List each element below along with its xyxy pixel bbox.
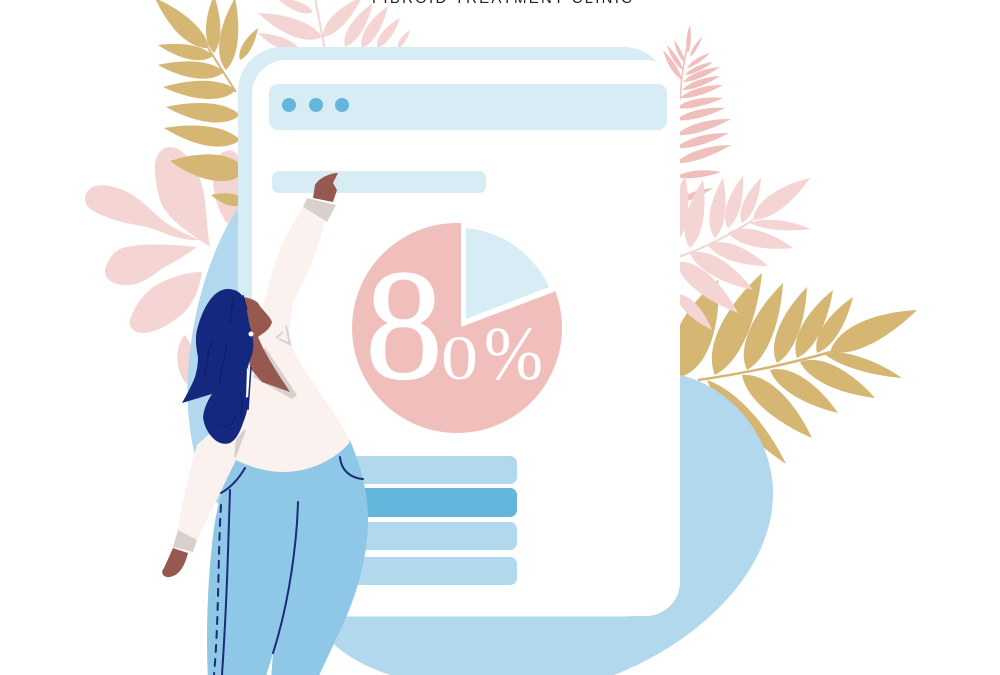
window dots [282, 98, 349, 112]
collar shadow [253, 347, 297, 399]
window frame [238, 47, 668, 617]
heading bar [272, 171, 486, 193]
address bar [269, 84, 667, 130]
hair [182, 289, 253, 444]
jeans [207, 440, 368, 675]
cuffs [173, 198, 336, 552]
percent sign: % [484, 312, 543, 396]
pie chart value: 8 [365, 238, 443, 413]
browser window card [238, 47, 680, 617]
sweater body and arms [178, 207, 350, 540]
percent suffix zero: 0 [441, 325, 478, 393]
earring [248, 332, 254, 336]
hair highlight [246, 367, 249, 398]
woman figure [162, 173, 368, 675]
hands, face and neck [162, 173, 338, 577]
leaf: pink frond top [255, 0, 412, 56]
background blue blob [188, 205, 773, 675]
jeans seams and pocket lines [214, 457, 363, 675]
armpit creases [276, 326, 290, 344]
loose hair strand [248, 367, 251, 410]
leaf: gold frond right [662, 266, 922, 469]
leaf: gold frond top left [148, 0, 262, 208]
list rows [340, 456, 517, 585]
leaf: pink frond right [669, 170, 815, 334]
leaf: pink petals left [85, 147, 240, 387]
leaf: salmon frond top right [660, 25, 732, 206]
pie chart [352, 215, 575, 433]
hair strands [205, 295, 247, 427]
window body [252, 60, 680, 616]
sleeve shadow [235, 430, 245, 457]
